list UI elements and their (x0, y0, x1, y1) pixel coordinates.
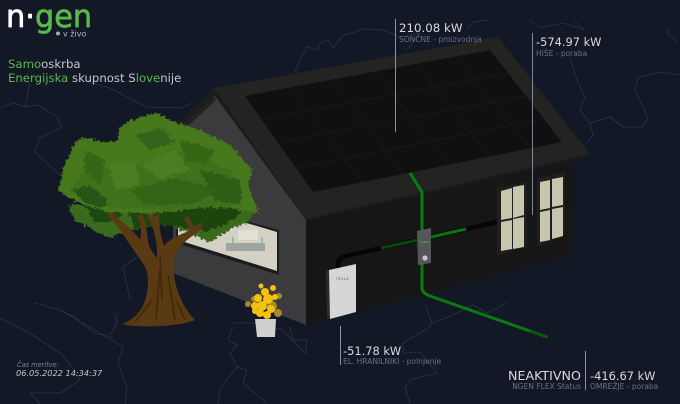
roof barge edge (172, 88, 306, 220)
meter box (417, 228, 431, 265)
subtitle: Samooskrba (8, 57, 81, 71)
front wall (306, 157, 574, 325)
house (172, 37, 590, 344)
roof slope (214, 37, 590, 219)
callout: solar: 210.08 kW (399, 21, 463, 35)
solar panels (245, 50, 562, 192)
tree (58, 113, 259, 326)
callout: grid: OMREŽJE - poraba (590, 382, 658, 391)
energy flow: grid line (410, 173, 530, 331)
logo: gen (35, 0, 92, 35)
canopy back (68, 205, 259, 242)
flower pot (245, 284, 282, 337)
subtitle (8, 57, 181, 85)
timestamp (16, 360, 103, 378)
timestamp: Čas meritve: (17, 360, 59, 369)
callout: house: -574.97 kW (536, 35, 601, 49)
timestamp: 06.05.2022 14:34:37 (16, 368, 103, 378)
callout: grid: -416.67 kW (590, 369, 655, 383)
logo: v živo (63, 30, 86, 38)
callout: solar (395, 19, 482, 132)
subtitle: Energijska skupnost Slovenije (8, 71, 181, 85)
callout: flex status: NEAKTIVNO (508, 369, 581, 383)
callout: battery: EL. HRANILNIKI - polnjenje (343, 357, 442, 366)
window left (497, 182, 527, 256)
trunk (105, 212, 202, 326)
callout: grid (585, 351, 658, 391)
callout: house: HIŠE - poraba (536, 49, 587, 58)
battery: TESLA (335, 277, 349, 281)
meter box: n·gen (420, 240, 430, 244)
window right (537, 172, 565, 247)
logo: n· (6, 0, 35, 35)
gable wall (173, 92, 306, 325)
callout: house (532, 33, 601, 215)
canopy front (58, 113, 259, 213)
callout: flex status (508, 369, 581, 391)
callout: flex status: NGEN FLEX Status (512, 382, 581, 391)
energy flow: battery (381, 240, 418, 248)
callout: battery (340, 326, 442, 366)
logo (6, 0, 92, 38)
gable window (176, 198, 279, 275)
callout: solar: SONČNE - proizvodnja (399, 35, 482, 44)
battery (326, 264, 356, 319)
conduit (338, 222, 497, 272)
callout: battery: -51.78 kW (343, 344, 401, 358)
